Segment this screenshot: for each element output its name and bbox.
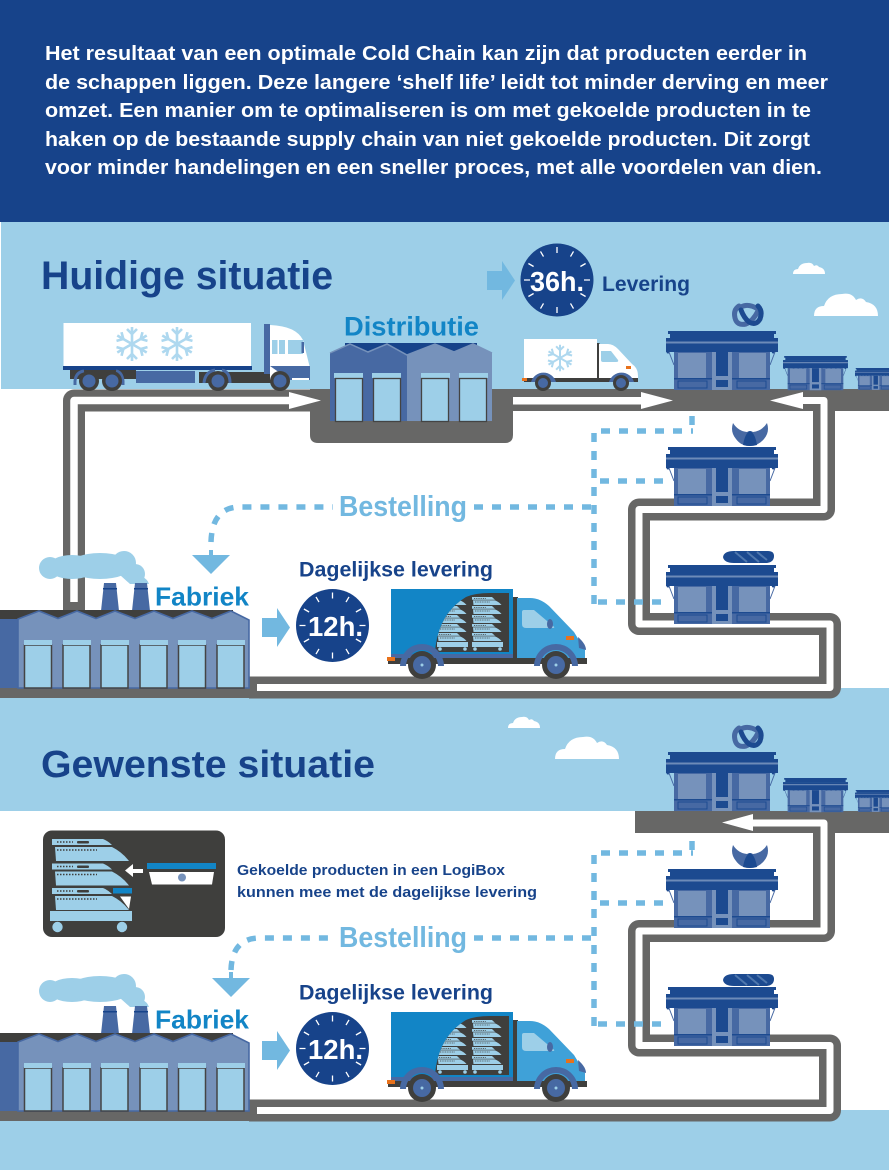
- clouds: current situation: [793, 263, 878, 316]
- label: Bestelling: Bestelling: [339, 491, 467, 523]
- shop: small: [783, 356, 848, 390]
- label: Bestelling lower: Bestelling: [339, 922, 467, 954]
- LogiBox panel: [43, 830, 225, 937]
- intro text: omzet. Een manier om te optimaliseren is om met gekoelde producten in te: [45, 99, 811, 122]
- arrow to 36h clock: [487, 261, 515, 300]
- sky: desired situation: [0, 688, 889, 811]
- title: Huidige situatie: Huidige situatie: [41, 254, 333, 298]
- title: Gewenste situatie: Gewenste situatie: [41, 744, 375, 786]
- shop: baguette bakery lower: [666, 987, 778, 1046]
- factory: desired situation: [0, 974, 249, 1111]
- shop: pretzel bakery lower: [666, 752, 778, 811]
- icon: pretzel: [734, 305, 761, 324]
- shop: baguette bakery: [666, 565, 778, 624]
- intro text: Het resultaat van een optimale Cold Chain kan zijn dat producten eerder in: [45, 42, 807, 65]
- road network: current situation: [0, 389, 889, 698]
- sky: bottom band: [0, 1110, 889, 1170]
- clouds: desired situation: [508, 717, 619, 759]
- icon: pretzel lower: [734, 727, 761, 746]
- label: Dagelijkse levering lower: Dagelijkse levering: [299, 980, 493, 1004]
- arrow: order to factory: [192, 550, 230, 574]
- arrow to 12h clock lower: [262, 1031, 290, 1070]
- LogiBox crate: [147, 863, 216, 884]
- label: Levering: Levering: [602, 272, 690, 296]
- icon: croissant lower: [732, 845, 768, 868]
- label: Distributie: Distributie: [344, 312, 479, 342]
- arrow to 12h clock: [262, 608, 290, 647]
- clock: 36 hours: 36h.: [530, 266, 584, 297]
- intro text: [45, 42, 828, 179]
- label: Dagelijkse levering: Dagelijkse levering: [299, 558, 493, 582]
- shop: pretzel bakery: [666, 331, 778, 390]
- clock: 36 hours: [520, 244, 594, 316]
- icon: refrigerated semi truck: [63, 323, 310, 391]
- rack tiers: [50, 839, 132, 932]
- dashed order lines: desired situation: [231, 835, 693, 1026]
- shop: croissant bakery lower: [666, 869, 778, 928]
- icon: refrigerated van: [522, 339, 638, 391]
- shop: smallest lower: [855, 790, 889, 812]
- icon: blue delivery truck: [387, 589, 587, 679]
- arrow: order to factory lower: [212, 972, 250, 997]
- intro text: de schappen liggen. Deze langere ‘shelf life’ leidt tot minder derving en meer: [45, 71, 828, 94]
- icon: baguette: [723, 551, 774, 563]
- label: Fabriek: Fabriek: [155, 582, 250, 612]
- factory: current situation: [0, 551, 249, 688]
- clock: 12 hours lower: 12h.: [308, 1034, 363, 1065]
- intro text: haken op de bestaande supply chain van niet gekoelde producten. Dit zorgt: [45, 128, 810, 151]
- clock: 12 hours lower: [296, 1012, 369, 1085]
- dashed order lines: current situation: [211, 412, 693, 604]
- intro text: voor minder handelingen en een sneller proces, met alle voordelen van dien.: [45, 156, 822, 179]
- arrow: box into rack: [125, 864, 143, 877]
- label: Fabriek lower: Fabriek: [155, 1004, 250, 1034]
- sky: current situation: [1, 222, 889, 389]
- icon: croissant: [732, 423, 768, 446]
- clock: 12 hours: [296, 589, 369, 662]
- shop: smallest: [855, 368, 889, 390]
- clock: 12 hours: 12h.: [308, 611, 363, 642]
- icon: blue delivery truck lower: [387, 1012, 587, 1102]
- header panel: [0, 0, 889, 222]
- shop: croissant bakery: [666, 447, 778, 506]
- shop: small lower: [783, 778, 848, 812]
- icon: distribution warehouse: [330, 343, 492, 422]
- icon: baguette lower: [723, 974, 774, 986]
- LogiBox caption: Gekoelde producten in een LogiBox: [237, 863, 505, 879]
- LogiBox caption: [237, 863, 537, 901]
- road network: desired situation: [0, 811, 889, 1121]
- LogiBox caption: kunnen mee met de dagelijkse levering: [237, 885, 537, 901]
